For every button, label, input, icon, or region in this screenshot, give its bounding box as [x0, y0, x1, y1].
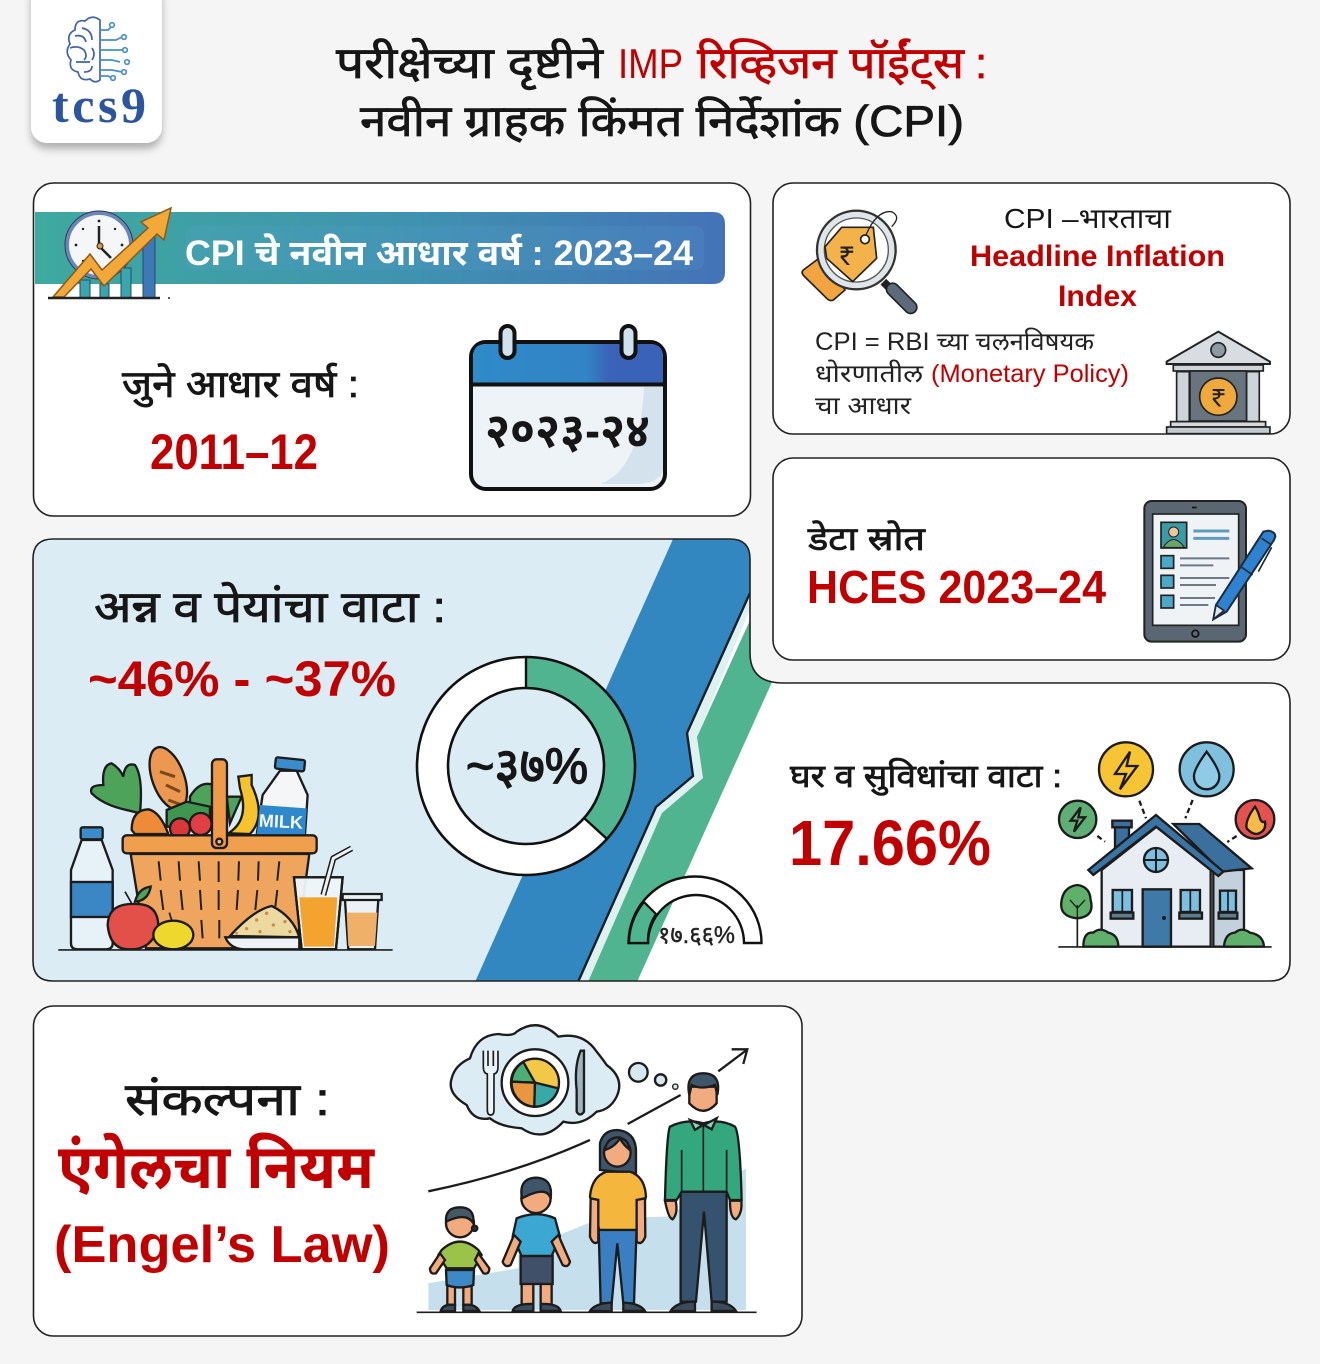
icon: food basket	[58, 742, 393, 950]
icon: brain circuit	[67, 17, 129, 82]
logo wordmark: tcs9	[52, 77, 146, 133]
banner: CPI चे नवीन आधार वर्ष : 2023–24	[185, 233, 694, 273]
Engel's law Marathi: एंगेलचा नियम	[58, 1131, 375, 1202]
illustration: family and food thought	[417, 1025, 757, 1312]
panel: new base year	[34, 183, 750, 516]
old base year label: जुने आधार वर्ष :	[122, 362, 359, 407]
icon: bank building: ₹	[1211, 382, 1226, 413]
man	[665, 1073, 742, 1311]
title: :	[975, 39, 987, 88]
thought cloud with plate	[451, 1025, 619, 1134]
heading: headline inflation index: Index	[1058, 280, 1137, 313]
housing share value: 17.66%	[789, 807, 991, 879]
icon: food basket: MILK	[258, 811, 303, 833]
child 2	[503, 1178, 570, 1311]
icon: house with utilities	[1058, 742, 1274, 947]
data source value: HCES 2023–24	[807, 561, 1106, 613]
banner	[35, 212, 725, 284]
icon: calendar	[471, 326, 665, 489]
text: CPI monetary policy	[815, 327, 1129, 420]
Engel's law English: (Engel’s Law)	[54, 1216, 390, 1274]
panel: headline inflation	[773, 183, 1290, 434]
icon: magnifier over price tag: ₹	[838, 239, 855, 272]
text: CPI monetary policy: CPI = RBI च्या चलनविषयक	[815, 327, 1095, 356]
panel: data source	[773, 458, 1290, 660]
donut chart: ~३७%	[466, 738, 588, 794]
concept label: संकल्पना :	[125, 1073, 330, 1125]
housing share label: घर व सुविधांचा वाटा :	[790, 758, 1062, 796]
logo card	[31, 0, 162, 143]
panel: food and housing share	[33, 539, 1290, 982]
old base year value: 2011–12	[150, 424, 318, 480]
title: नवीन ग्राहक किंमत निर्देशांक (CPI)	[360, 96, 964, 146]
panel: Engel's law	[34, 1006, 802, 1336]
gauge chart	[628, 876, 762, 949]
title	[336, 37, 987, 146]
icon: calendar: २०२३-२४	[485, 405, 650, 458]
heading: CPI india: CPI –भारताचा	[1004, 203, 1172, 234]
text: CPI monetary policy: धोरणातील	[815, 359, 924, 388]
title: रिव्हिजन पॉईंट्स	[697, 38, 965, 90]
icon: tablet and pen	[1144, 501, 1275, 642]
food share label: अन्न व पेयांचा वाटा :	[94, 581, 446, 632]
text: CPI monetary policy: (Monetary Policy)	[931, 360, 1129, 388]
title: IMP	[618, 40, 683, 87]
text: CPI monetary policy: चा आधार	[815, 392, 912, 420]
data source label: डेटा स्रोत	[807, 519, 926, 557]
title: परीक्षेच्या दृष्टीने	[336, 37, 605, 90]
food share value: ~46% - ~37%	[88, 651, 396, 707]
heading: headline inflation index: Headline Inflation	[970, 240, 1225, 273]
icon: magnifier over price tag	[802, 211, 911, 307]
donut chart	[417, 657, 635, 875]
heading: headline inflation index	[970, 240, 1225, 313]
gauge chart: १७.६६%	[658, 922, 735, 949]
icon: clock and rising arrow	[48, 208, 171, 299]
icon: bank building	[1167, 332, 1270, 434]
woman	[590, 1130, 646, 1311]
child 1	[430, 1207, 489, 1311]
